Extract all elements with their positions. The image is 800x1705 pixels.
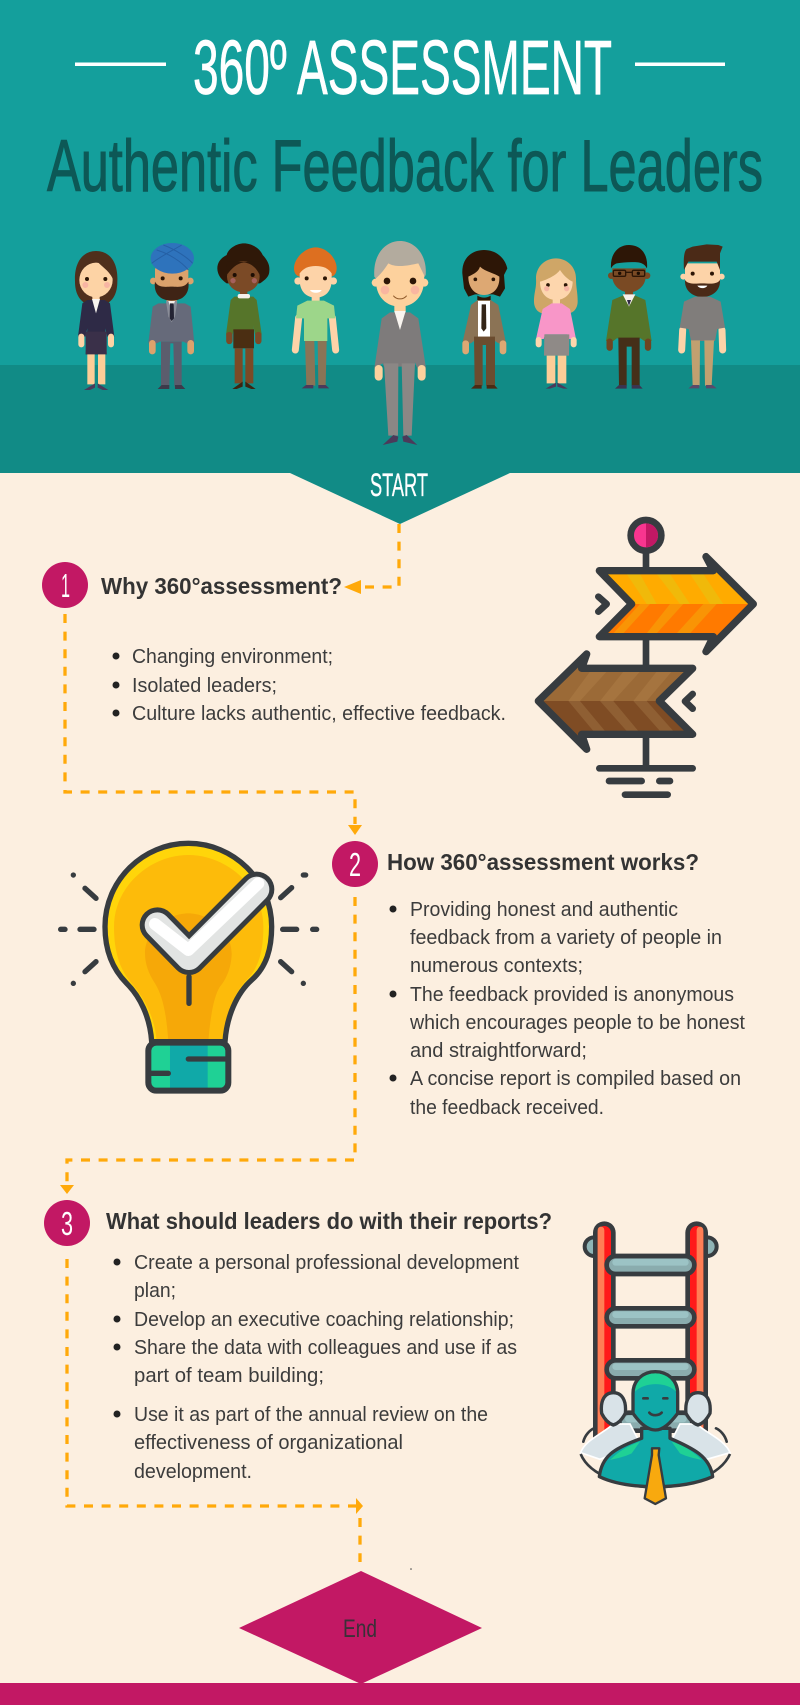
person 6: man with dark hair and tie (462, 250, 507, 389)
step 1 bullet list: Culture lacks authentic, effective feedback. (132, 703, 506, 725)
step 1 bullet list: Changing environment; (132, 646, 333, 668)
arrow: step 1 to step 2 (65, 614, 362, 835)
step 1 bullet list: Isolated leaders; (132, 675, 277, 697)
step 3 bullet list: effectiveness of organizational (134, 1432, 403, 1454)
step 2 bullet list: and straightforward; (410, 1040, 587, 1062)
icon: light bulb with check mark (61, 843, 317, 1091)
step 3 bullet list: Share the data with colleagues and use if as (134, 1337, 517, 1359)
step 2 panel (332, 841, 745, 1119)
arrow: step 2 to step 3 (60, 897, 355, 1194)
step 2 bullet list: numerous contexts; (410, 955, 583, 977)
step 3 bullet list: plan; (134, 1280, 176, 1302)
step 1 bullet list (112, 646, 506, 725)
step 3 badge: 3 (61, 1205, 73, 1242)
step 2 bullet list: A concise report is compiled based on (410, 1068, 741, 1090)
icon: signpost (538, 520, 753, 795)
step 3 bullet list: Develop an executive coaching relationship; (134, 1309, 514, 1331)
end marker: End (343, 1615, 377, 1643)
step 3 bullet list: development. (134, 1461, 252, 1483)
step 1 badge (42, 562, 88, 608)
person 7: blonde woman in pink blouse (534, 258, 578, 389)
end marker (239, 1571, 482, 1684)
step 3 bullet list: Use it as part of the annual review on the (134, 1404, 488, 1426)
step 2 bullet list: which encourages people to be honest (409, 1012, 745, 1034)
step 2 bullet list: The feedback provided is anonymous (410, 984, 734, 1006)
footer bar (0, 1683, 800, 1705)
step 2 heading: How 360°assessment works? (387, 849, 699, 875)
step 2 badge: 2 (349, 846, 361, 883)
step 2 bullet list: the feedback received. (410, 1097, 604, 1119)
step 2 bullet list: feedback from a variety of people in (410, 927, 722, 949)
start marker: START (370, 467, 428, 503)
step 3 heading: What should leaders do with their reports? (106, 1208, 552, 1234)
step 1 heading: Why 360°assessment? (101, 573, 342, 599)
person 1: woman in dark suit (75, 251, 117, 390)
step 3 panel (44, 1200, 552, 1483)
step 2 badge (332, 841, 378, 887)
step 2 bullet list (390, 899, 745, 1119)
arrow: start to step 1 (344, 524, 399, 594)
illustration: group of people, right side (462, 244, 725, 389)
step 3 bullet list: part of team building; (134, 1365, 324, 1387)
step 3 bullet list (114, 1252, 519, 1483)
step 1 panel (42, 562, 506, 725)
person 3: woman with curly hair (217, 243, 269, 389)
header panel (0, 0, 800, 473)
step 1 badge: 1 (61, 567, 70, 604)
illustration: group of people, left side (75, 241, 428, 445)
icon: ladder and team (581, 1230, 730, 1504)
arrow: step 3 to end (67, 1259, 363, 1562)
person 2: man in turban (148, 243, 194, 389)
person 5: central older woman in suit (372, 241, 428, 445)
person 9: bearded man in grey shirt (680, 244, 725, 388)
person 8: man with glasses and green sweater (606, 245, 652, 389)
step 3 bullet list: Create a personal professional development (134, 1252, 519, 1274)
step 3 badge (44, 1200, 90, 1246)
start marker (290, 467, 510, 524)
person 4: man with red hair (294, 247, 337, 388)
step 2 bullet list: Providing honest and authentic (410, 899, 678, 921)
